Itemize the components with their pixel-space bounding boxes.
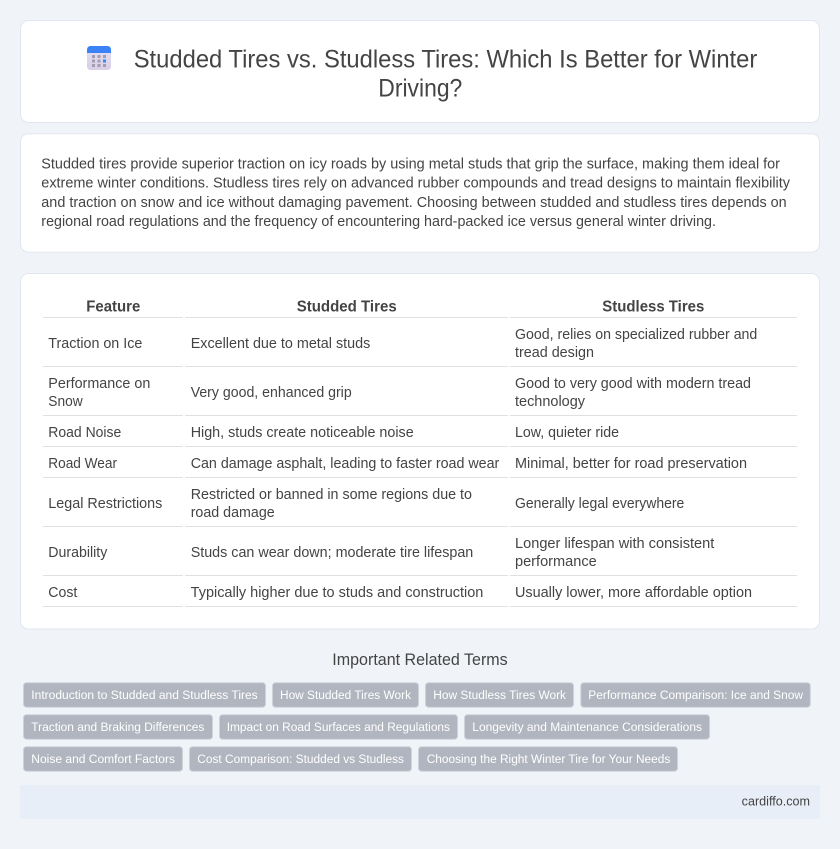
footer — [20, 785, 820, 819]
chip: noise and comfort: Noise and Comfort Factors — [31, 752, 175, 766]
row: traction on ice: Excellent due to metal studs — [191, 336, 370, 352]
chip: cost comparison: Cost Comparison: Studded vs Studless — [197, 752, 404, 766]
panel: introduction text: regional road regulations and the frequency of encountering hard-packed ice versus general winter driving. — [41, 214, 716, 230]
chip: longevity — [464, 715, 710, 739]
chip: how studless tires work: How Studless Tires Work — [433, 688, 567, 702]
chip: cost comparison — [190, 747, 412, 771]
panel: comparison table — [20, 274, 820, 629]
footer: cardiffo.com — [742, 795, 810, 809]
row: cost: Typically higher due to studs and construction — [191, 585, 483, 601]
row: durability — [48, 536, 714, 570]
chip: introduction — [24, 683, 266, 707]
row: traction on ice: tread design — [515, 345, 594, 361]
row: performance on snow: technology — [515, 394, 586, 410]
title: Studded Tires vs. Studless Tires: Which Is Better for Winter — [134, 45, 757, 73]
row: cost: Cost — [48, 585, 77, 601]
row: road wear: Minimal, better for road preservation — [515, 456, 747, 472]
row: cost: Usually lower, more affordable option — [515, 585, 752, 601]
row: legal restrictions: Restricted or banned in some regions due to — [191, 487, 472, 503]
row: traction on ice: Traction on Ice — [48, 336, 142, 352]
chip: how studless tires work — [426, 683, 574, 707]
row: durability: Studs can wear down; moderate tire lifespan — [191, 545, 473, 561]
panel: introduction text — [20, 134, 820, 252]
title: Driving? — [378, 75, 462, 103]
title — [134, 45, 757, 103]
row: legal restrictions: road damage — [191, 505, 275, 521]
chip: traction and braking — [24, 715, 212, 739]
chip: traction and braking: Traction and Braking Differences — [31, 720, 204, 734]
chip: road surfaces — [220, 715, 458, 739]
table header: Studless Tires — [602, 299, 704, 316]
row: road wear — [48, 456, 747, 472]
row: performance on snow — [48, 376, 751, 410]
chip: choosing the right tire: Choosing the Right Winter Tire for Your Needs — [427, 752, 670, 766]
chip: how studded tires work: How Studded Tires Work — [280, 688, 412, 702]
chip: noise and comfort — [24, 747, 182, 771]
row: legal restrictions: Legal Restrictions — [48, 496, 162, 512]
row: durability: Durability — [48, 545, 108, 561]
row: performance on snow: Snow — [48, 394, 83, 410]
panel: title card — [20, 20, 820, 122]
row: road wear: Can damage asphalt, leading to faster road wear — [191, 456, 499, 472]
table header — [86, 299, 704, 316]
row: cost — [48, 585, 752, 601]
row: road noise: Low, quieter ride — [515, 425, 619, 441]
chip: performance comparison — [581, 683, 810, 707]
chip: introduction: Introduction to Studded and Studless Tires — [31, 688, 258, 702]
panel: introduction text: and traction on snow and ice without damaging pavement. Choosing between studded and studless tires depends on — [41, 195, 787, 211]
row: legal restrictions — [48, 487, 684, 521]
icon: calendar — [87, 46, 111, 70]
panel: introduction text: Studded tires provide superior traction on icy roads by using metal studs that grip the surface, making them ideal for — [41, 156, 780, 172]
chip: choosing the right tire — [418, 747, 678, 771]
row: road noise — [48, 425, 619, 441]
row: durability: performance — [515, 554, 597, 570]
row: traction on ice: Good, relies on specialized rubber and — [515, 327, 757, 343]
row: legal restrictions: Generally legal everywhere — [515, 496, 684, 512]
chip: how studded tires work — [272, 683, 418, 707]
row: performance on snow: Performance on — [48, 376, 150, 392]
related term chips — [24, 683, 810, 771]
chip: performance comparison: Performance Comparison: Ice and Snow — [588, 688, 803, 702]
table header: Feature — [86, 299, 140, 316]
chip: road surfaces: Impact on Road Surfaces and Regulations — [227, 720, 450, 734]
row: performance on snow: Good to very good with modern tread — [515, 376, 751, 392]
row: performance on snow: Very good, enhanced grip — [191, 385, 352, 401]
row: traction on ice — [48, 327, 757, 361]
row: road noise: High, studs create noticeable noise — [191, 425, 414, 441]
row: durability: Longer lifespan with consistent — [515, 536, 714, 552]
row: road noise: Road Noise — [48, 425, 121, 441]
row: road wear: Road Wear — [48, 456, 117, 472]
table header: Studded Tires — [297, 299, 397, 316]
chip: longevity: Longevity and Maintenance Considerations — [472, 720, 702, 734]
panel: introduction text: extreme winter conditions. Studless tires rely on advanced rubber compounds and tread designs to maintain flexibility — [41, 175, 791, 191]
heading: important related terms: Important Related Terms — [332, 651, 508, 669]
